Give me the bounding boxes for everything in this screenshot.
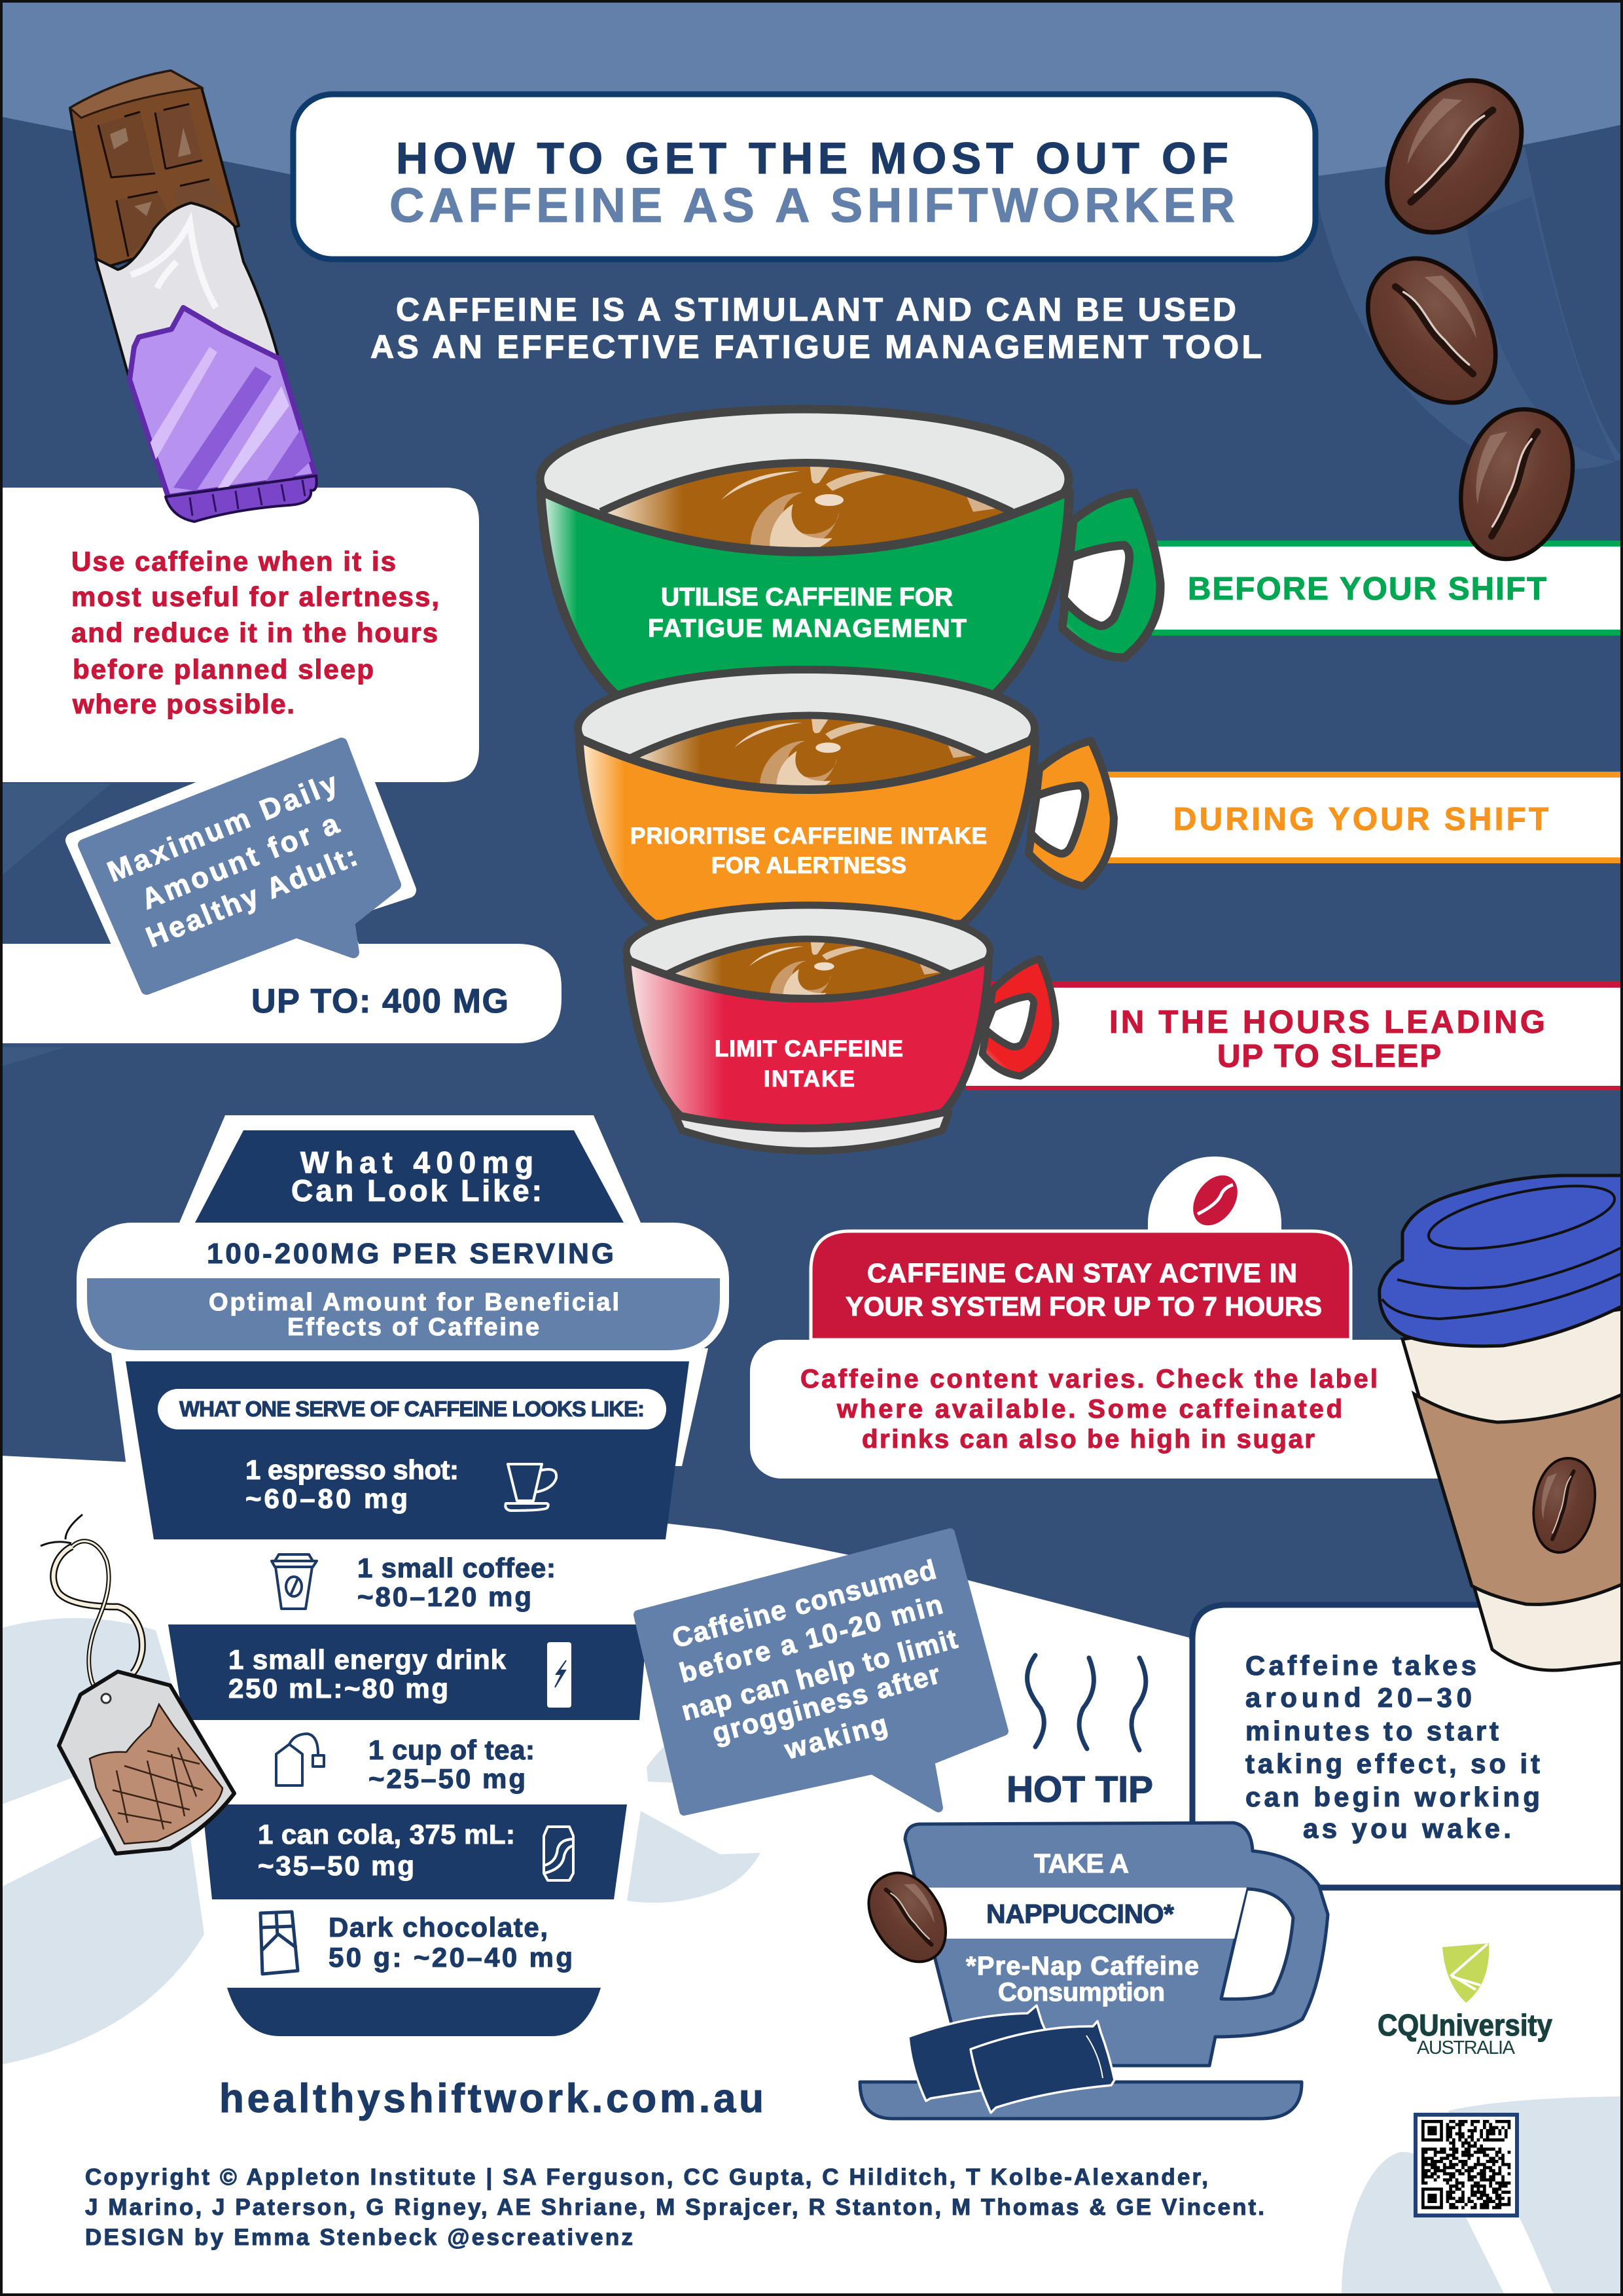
row: energy drink: [168, 1624, 647, 1720]
ribbon: before your shift: BEFORE YOUR SHIFT: [1188, 571, 1546, 607]
illustration: nappuccino cup: NAPPUCCINO*: [986, 1899, 1174, 1929]
panel: caffeine can stay active: where available. Some caffeinated: [836, 1395, 1342, 1424]
icon: steam: [1027, 1655, 1146, 1750]
logo: CQUniversity: [1378, 1943, 1552, 2058]
subtitle: CAFFEINE IS A STIMULANT AND CAN BE USED: [396, 291, 1236, 328]
illustration: three coffee beans: [1346, 58, 1584, 570]
row: cup of tea: [276, 1734, 535, 1794]
panel: what 400mg can look like, cup shape: [77, 1115, 729, 2036]
callout: nap caffeine: nap can help to limit: [678, 1623, 961, 1727]
logo: CQUniversity: CQUniversity: [1378, 2008, 1552, 2042]
panel: caffeine takes 20-30 minutes: minutes to start: [1245, 1715, 1499, 1746]
title box: HOW TO GET THE MOST OUT OF: [396, 134, 1228, 183]
panel: caffeine can stay active: [750, 1157, 1476, 1479]
cup lid: Can Look Like:: [291, 1174, 542, 1208]
serving band: Optimal Amount for Beneficial: [209, 1289, 619, 1316]
ribbon: leading up to sleep: UP TO SLEEP: [1217, 1039, 1441, 1074]
ribbon: during your shift: [1106, 772, 1623, 863]
ribbon: leading up to sleep: [966, 981, 1623, 1090]
illustration: nappuccino cup: Consumption: [998, 1978, 1165, 2007]
panel: up to 400 mg: [0, 944, 562, 1043]
panel: caffeine can stay active: CAFFEINE CAN STAY ACTIVE IN: [867, 1258, 1297, 1288]
heading: hot tip: HOT TIP: [1007, 1768, 1153, 1810]
callout: nap caffeine: [638, 1533, 1004, 1811]
panel: caffeine takes 20-30 minutes: as you wake.: [1303, 1813, 1511, 1844]
panel: up to 400 mg: UP TO: 400 MG: [251, 982, 508, 1020]
serving band: Effects of Caffeine: [287, 1314, 539, 1341]
callout: maximum daily amount: Amount for a: [137, 808, 344, 916]
illustration: chocolate bar: [70, 71, 317, 522]
illustration: pillows: [908, 2005, 1115, 2113]
logo: CQUniversity: AUSTRALIA: [1417, 2037, 1516, 2058]
illustration: nappuccino cup: [905, 1823, 1328, 2066]
illustration: nappuccino cup: TAKE A: [1034, 1848, 1129, 1878]
cup: orange, alertness: [578, 670, 1114, 924]
cup: green, fatigue management: UTILISE CAFFEINE FOR: [661, 583, 953, 611]
title box: [293, 94, 1315, 259]
icon: bean tab: [1148, 1157, 1281, 1237]
row: espresso shot: 1 espresso shot:: [245, 1454, 459, 1485]
serving band: 100-200MG PER SERVING: [207, 1238, 614, 1270]
title box: CAFFEINE AS A SHIFTWORKER: [389, 178, 1235, 232]
cup: orange, alertness: PRIORITISE CAFFEINE INTAKE: [630, 823, 987, 849]
callout: nap caffeine: grogginess after: [709, 1659, 943, 1749]
row: small coffee: 1 small coffee:: [357, 1552, 556, 1583]
panel: caffeine can stay active: YOUR SYSTEM FOR UP TO 7 HOURS: [846, 1291, 1322, 1321]
panel: use caffeine when useful: most useful for alertness,: [71, 581, 439, 612]
row: can of cola: 1 can cola, 375 mL:: [258, 1819, 515, 1850]
cup lid: What 400mg: [300, 1145, 533, 1179]
row: espresso shot: [126, 1361, 689, 1539]
illustration: bean beside cup: [856, 1860, 959, 1975]
cup: orange, alertness: FOR ALERTNESS: [711, 853, 906, 878]
row: cup of tea: 1 cup of tea:: [368, 1734, 535, 1765]
callout: maximum daily amount: [73, 730, 408, 1001]
panel: caffeine can stay active: drinks can also be high in sugar: [862, 1425, 1315, 1454]
row: can of cola: [202, 1804, 627, 1899]
cup: red, limit caffeine: INTAKE: [764, 1066, 855, 1092]
subtitle: AS AN EFFECTIVE FATIGUE MANAGEMENT TOOL: [370, 329, 1262, 365]
panel: use caffeine when useful: before planned sleep: [73, 654, 374, 685]
panel: use caffeine when useful: and reduce it in the hours: [71, 617, 438, 648]
row: energy drink: 250 mL:~80 mg: [228, 1673, 448, 1704]
ribbon: before your shift: [1152, 541, 1623, 636]
row: dark chocolate: 50 g: ~20–40 mg: [329, 1942, 573, 1973]
row: cup of tea: ~25–50 mg: [368, 1763, 526, 1794]
callout: maximum daily amount: Healthy Adult:: [141, 840, 362, 954]
row: small coffee: ~80–120 mg: [357, 1581, 531, 1612]
serving band: [77, 1223, 729, 1357]
callout: nap caffeine: before a 10-20 min: [676, 1588, 946, 1689]
illustration: nappuccino cup: *Pre-Nap Caffeine: [966, 1952, 1199, 1981]
ribbon: leading up to sleep: IN THE HOURS LEADING: [1109, 1005, 1545, 1040]
copyright: DESIGN by Emma Stenbeck @escreativenz: [85, 2225, 633, 2250]
cup: green, fatigue management: FATIGUE MANAGEMENT: [648, 615, 967, 643]
row: can of cola: ~35–50 mg: [258, 1850, 414, 1881]
cup base: [227, 1988, 601, 2036]
row: dark chocolate: [260, 1912, 573, 1974]
cup: red, limit caffeine: LIMIT CAFFEINE: [715, 1036, 903, 1062]
panel: use caffeine when useful: [0, 488, 479, 782]
copyright: J Marino, J Paterson, G Rigney, AE Shriane, M Sprajcer, R Stanton, M Thomas & GE Vincent.: [85, 2195, 1264, 2220]
callout: nap caffeine: waking: [781, 1708, 891, 1765]
cup lid: [179, 1115, 641, 1223]
copyright: Copyright © Appleton Institute | SA Ferguson, CC Gupta, C Hilditch, T Kolbe-Alexander,: [85, 2164, 1208, 2190]
copyright: [85, 2164, 1264, 2250]
ribbon: during your shift: DURING YOUR SHIFT: [1173, 802, 1548, 837]
row: small coffee: [272, 1552, 556, 1612]
illustration: takeaway coffee cup: [1380, 1174, 1623, 1670]
cup: green, fatigue management: [540, 409, 1160, 700]
callout: nap caffeine: Caffeine consumed: [669, 1554, 939, 1654]
panel: use caffeine when useful: where possible.: [72, 689, 294, 719]
illustration: tea bag: [41, 1515, 234, 1854]
row: energy drink: 1 small energy drink: [228, 1644, 507, 1675]
subtitle: [370, 291, 1262, 365]
QR code: [1416, 2115, 1517, 2215]
panel: caffeine can stay active: Caffeine content varies. Check the label: [800, 1365, 1378, 1393]
row: espresso shot: ~60–80 mg: [245, 1483, 408, 1514]
panel: caffeine takes 20-30 minutes: taking effect, so it: [1245, 1748, 1540, 1779]
cup: red, limit caffeine: [626, 905, 1056, 1151]
panel: caffeine takes 20-30 minutes: [1192, 1605, 1623, 1888]
row: espresso shot: WHAT ONE SERVE OF CAFFEINE LOOKS LIKE:: [179, 1397, 645, 1421]
panel: caffeine takes 20-30 minutes: Caffeine takes: [1245, 1650, 1476, 1681]
panel: caffeine takes 20-30 minutes: around 20–30: [1245, 1682, 1472, 1713]
panel: caffeine takes 20-30 minutes: can begin working: [1245, 1782, 1540, 1812]
cup white silhouette: [111, 1348, 708, 1466]
website: healthyshiftwork.com.au: [219, 2076, 764, 2121]
panel: use caffeine when useful: Use caffeine when it is: [71, 546, 396, 577]
row: dark chocolate: Dark chocolate,: [329, 1912, 548, 1943]
illustration: saucer: [860, 2082, 1302, 2119]
callout: maximum daily amount: Maximum Daily: [103, 767, 342, 888]
